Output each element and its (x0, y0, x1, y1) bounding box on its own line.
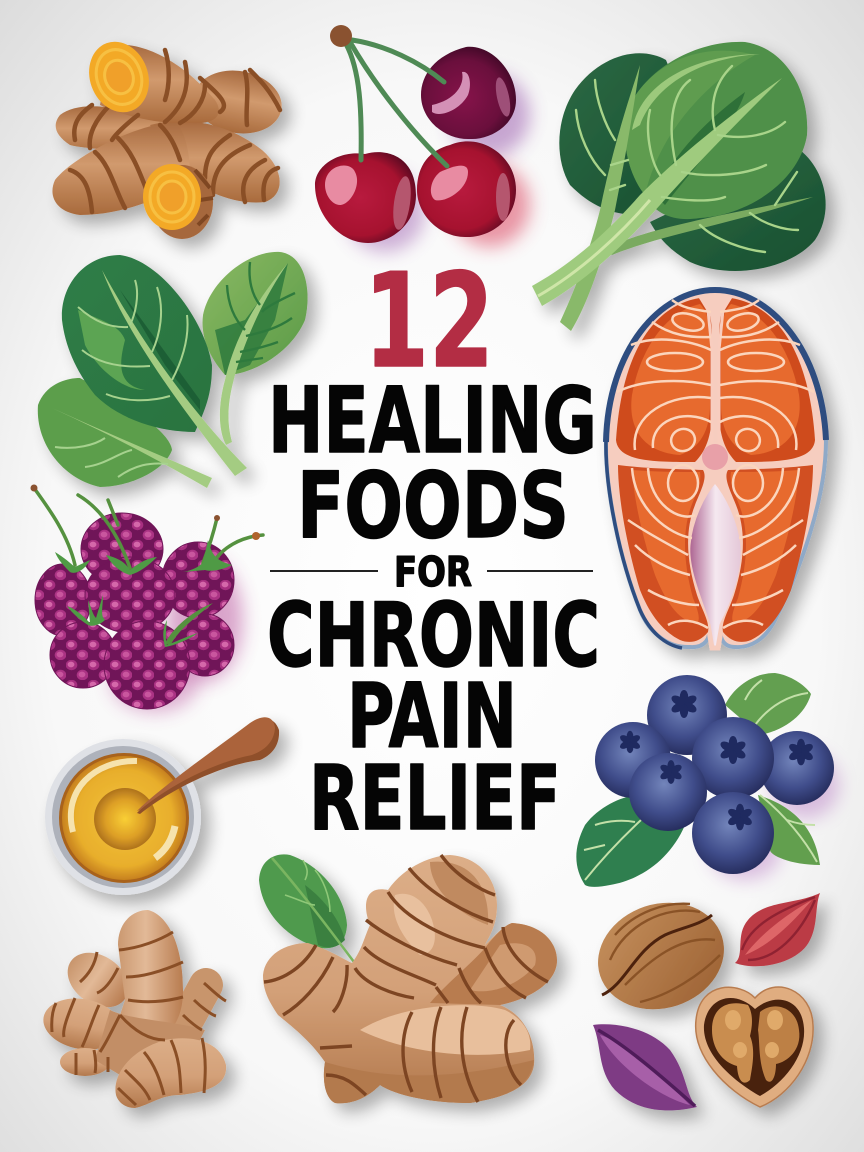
icon: purple seed (593, 1024, 697, 1110)
title (267, 245, 600, 850)
icon: honey bowl with spoon (45, 717, 279, 895)
icon: large ginger root with leaf (259, 854, 557, 1103)
title: pain: PAIN (347, 664, 517, 768)
icon: nuts and seeds (584, 887, 820, 1110)
icon: blueberries (576, 673, 839, 887)
title: foods: FOODS (297, 454, 569, 559)
icon: small ginger root (39, 910, 226, 1108)
title: relief: RELIEF (309, 746, 561, 850)
title: number 12: 12 (364, 245, 494, 397)
icon: turmeric root (52, 33, 287, 239)
icon: walnut (584, 887, 738, 1025)
icon: cherries (315, 25, 530, 252)
title: healing: HEALING (268, 369, 597, 474)
icon: red seed (735, 893, 820, 966)
icon: spinach left (38, 252, 308, 488)
icon: walnut half (696, 987, 813, 1107)
icon: spinach top right (532, 42, 826, 331)
title: for: FOR (394, 548, 472, 596)
icon: salmon steak (606, 290, 826, 648)
title: chronic: CHRONIC (267, 584, 600, 687)
icon: raspberries (30, 484, 263, 712)
